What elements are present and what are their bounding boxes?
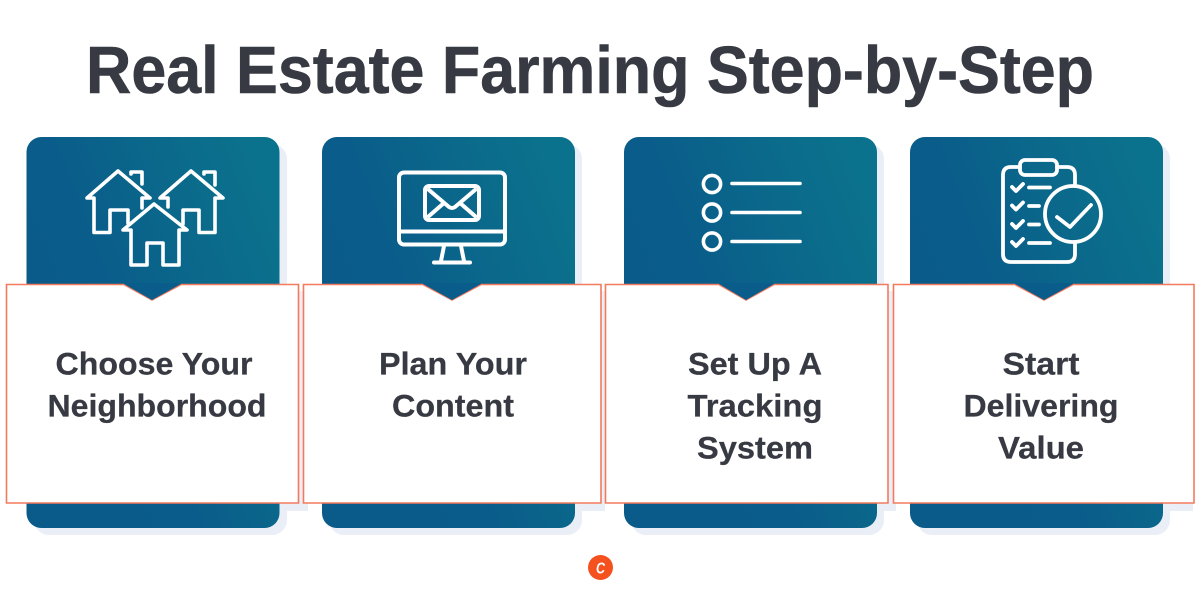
label: Choose Your bbox=[56, 346, 252, 382]
label bbox=[48, 346, 266, 424]
label bbox=[379, 346, 527, 424]
label: System bbox=[697, 430, 813, 466]
label: Plan Your bbox=[379, 346, 527, 382]
text card with pointer bbox=[606, 284, 888, 503]
text card with pointer bbox=[6, 284, 298, 503]
label: Value bbox=[998, 430, 1084, 466]
card background bbox=[26, 137, 308, 535]
logo badge bbox=[588, 555, 613, 580]
label: Tracking bbox=[688, 388, 822, 424]
panel: set up a tracking system bbox=[606, 137, 896, 535]
label: Neighborhood bbox=[48, 388, 266, 424]
label bbox=[688, 346, 822, 466]
label bbox=[964, 346, 1118, 466]
label: Start bbox=[1002, 346, 1080, 382]
card background bbox=[322, 137, 605, 535]
icon: clipboard with check bbox=[1003, 160, 1101, 262]
panel: plan your content bbox=[304, 137, 605, 535]
card background bbox=[910, 137, 1193, 535]
icon: three houses bbox=[87, 171, 223, 265]
label: Delivering bbox=[964, 388, 1118, 424]
text card with pointer bbox=[894, 284, 1194, 503]
label: Set Up A bbox=[688, 346, 822, 382]
card background bbox=[624, 137, 896, 535]
icon: checklist lines bbox=[703, 175, 800, 250]
label: Content bbox=[392, 388, 515, 424]
title: Real Estate Farming Step-by-Step bbox=[86, 33, 1094, 108]
panel: start delivering value bbox=[894, 137, 1194, 535]
icon: monitor with envelope bbox=[399, 172, 505, 262]
panel: choose your neighborhood bbox=[6, 137, 308, 535]
logo badge: C bbox=[596, 560, 605, 578]
text card with pointer bbox=[304, 284, 601, 503]
